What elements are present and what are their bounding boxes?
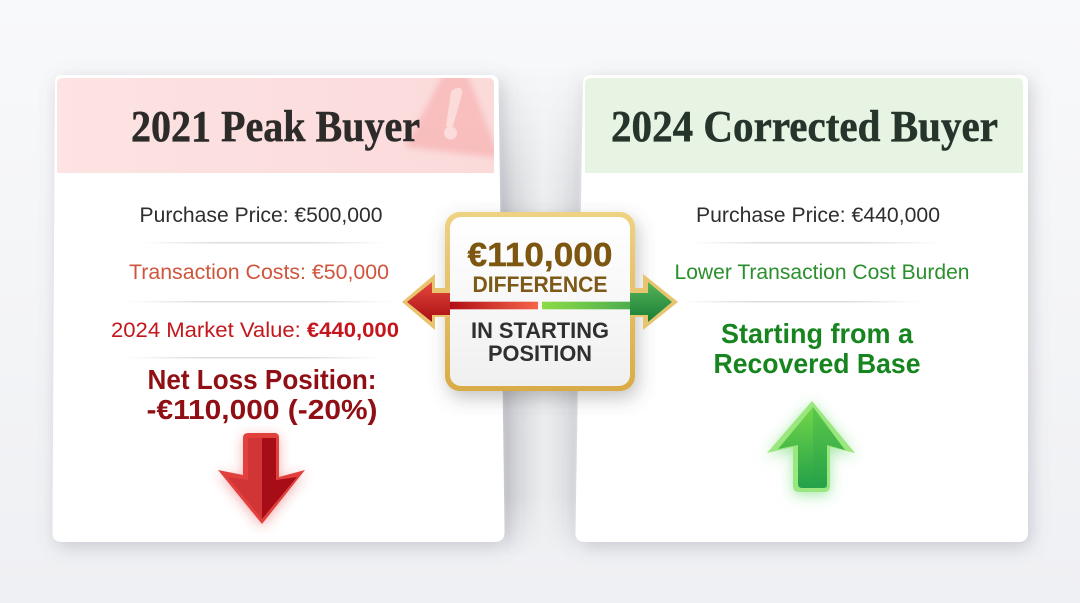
text: recovered base: Recovered Base bbox=[714, 348, 920, 379]
arrow: red left bbox=[402, 274, 538, 330]
callout: 110,000 difference bbox=[402, 212, 678, 391]
icon: warning triangle bbox=[405, 78, 494, 159]
text: net loss position bbox=[146, 364, 378, 425]
arrow: green right bbox=[542, 274, 678, 330]
text: net loss position: -€110,000 (-20%) bbox=[146, 394, 378, 425]
heading: 2024 Corrected Buyer: 2024 Corrected Buyer bbox=[611, 102, 998, 151]
text: transaction costs: Transaction Costs: €50,000 bbox=[129, 261, 389, 284]
label: in starting position: IN STARTING bbox=[471, 318, 609, 343]
label: in starting position: POSITION bbox=[488, 341, 592, 366]
text: purchase price: Purchase Price: €440,000 bbox=[696, 204, 940, 227]
text: purchase price: Purchase Price: €500,000 bbox=[140, 204, 382, 227]
header band: left bbox=[57, 78, 494, 173]
label: difference: DIFFERENCE bbox=[472, 272, 608, 297]
text: lower transaction cost: Lower Transaction Cost Burden bbox=[674, 261, 970, 284]
text: 2024 market value: 2024 Market Value: €440,000 bbox=[111, 318, 399, 342]
icon: red down arrow bbox=[218, 433, 305, 524]
label: in starting position bbox=[471, 318, 609, 366]
text: recovered base: Starting from a bbox=[721, 318, 913, 349]
card: right bbox=[575, 75, 1028, 542]
text: recovered base bbox=[714, 318, 920, 379]
heading: 2021 Peak Buyer: 2021 Peak Buyer bbox=[131, 102, 420, 151]
header band: right bbox=[585, 78, 1023, 173]
panel: 2024 corrected buyer bbox=[575, 75, 1028, 542]
card: left bbox=[52, 75, 504, 542]
value: 110,000: €110,000 bbox=[468, 236, 612, 273]
panel: 2021 peak buyer bbox=[52, 61, 504, 542]
callout box bbox=[445, 212, 635, 391]
icon: green up arrow bbox=[767, 401, 855, 492]
text: net loss position: Net Loss Position: bbox=[148, 364, 376, 395]
